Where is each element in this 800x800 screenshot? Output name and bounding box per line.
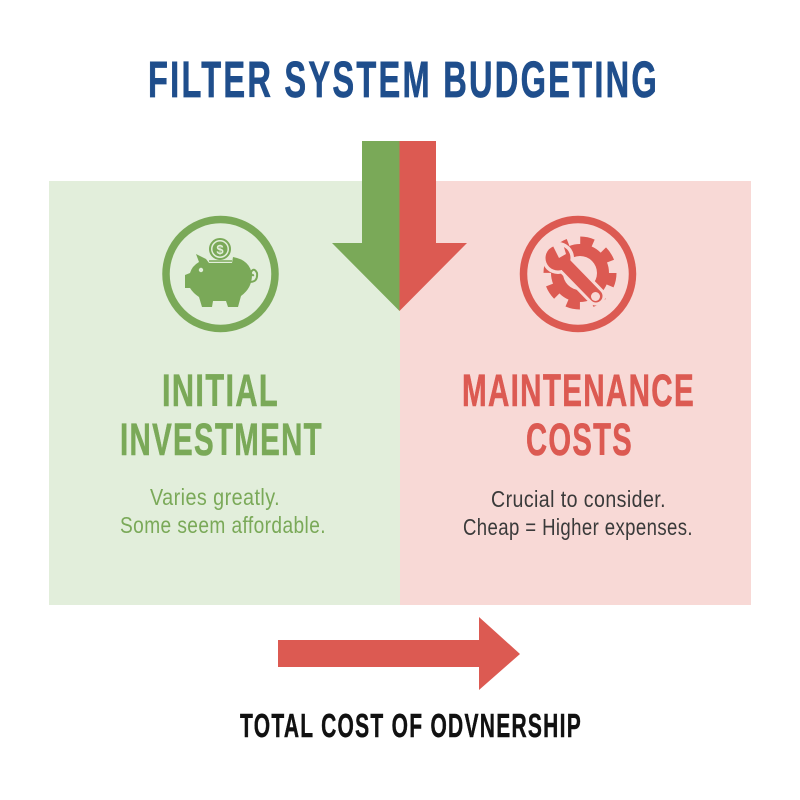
- icon: wrench and gear: [524, 220, 632, 328]
- heading: initial investment: [120, 365, 323, 465]
- arrow: right arrow: [278, 617, 520, 690]
- text: initial investment description: [120, 484, 326, 538]
- heading: initial investment: INVESTMENT: [120, 414, 323, 465]
- heading: initial investment: INITIAL: [162, 365, 279, 416]
- text: initial investment description: Some seem affordable.: [120, 512, 326, 538]
- heading: maintenance costs: [462, 365, 695, 465]
- icon: piggy bank: $: [216, 242, 224, 257]
- text: maintenance costs description: Crucial to consider.: [491, 486, 666, 512]
- label: total cost of ownership: TOTAL COST OF ODVNERSHIP: [240, 707, 582, 744]
- panel: maintenance costs: [400, 181, 751, 605]
- icon: piggy bank: [166, 220, 275, 328]
- text: initial investment description: Varies greatly.: [150, 484, 280, 510]
- text: maintenance costs description: Cheap = Higher expenses.: [463, 514, 693, 540]
- text: maintenance costs description: [463, 486, 693, 540]
- panel: initial investment: [49, 181, 400, 605]
- arrow: split down arrow: [332, 141, 467, 311]
- heading: maintenance costs: COSTS: [526, 414, 633, 465]
